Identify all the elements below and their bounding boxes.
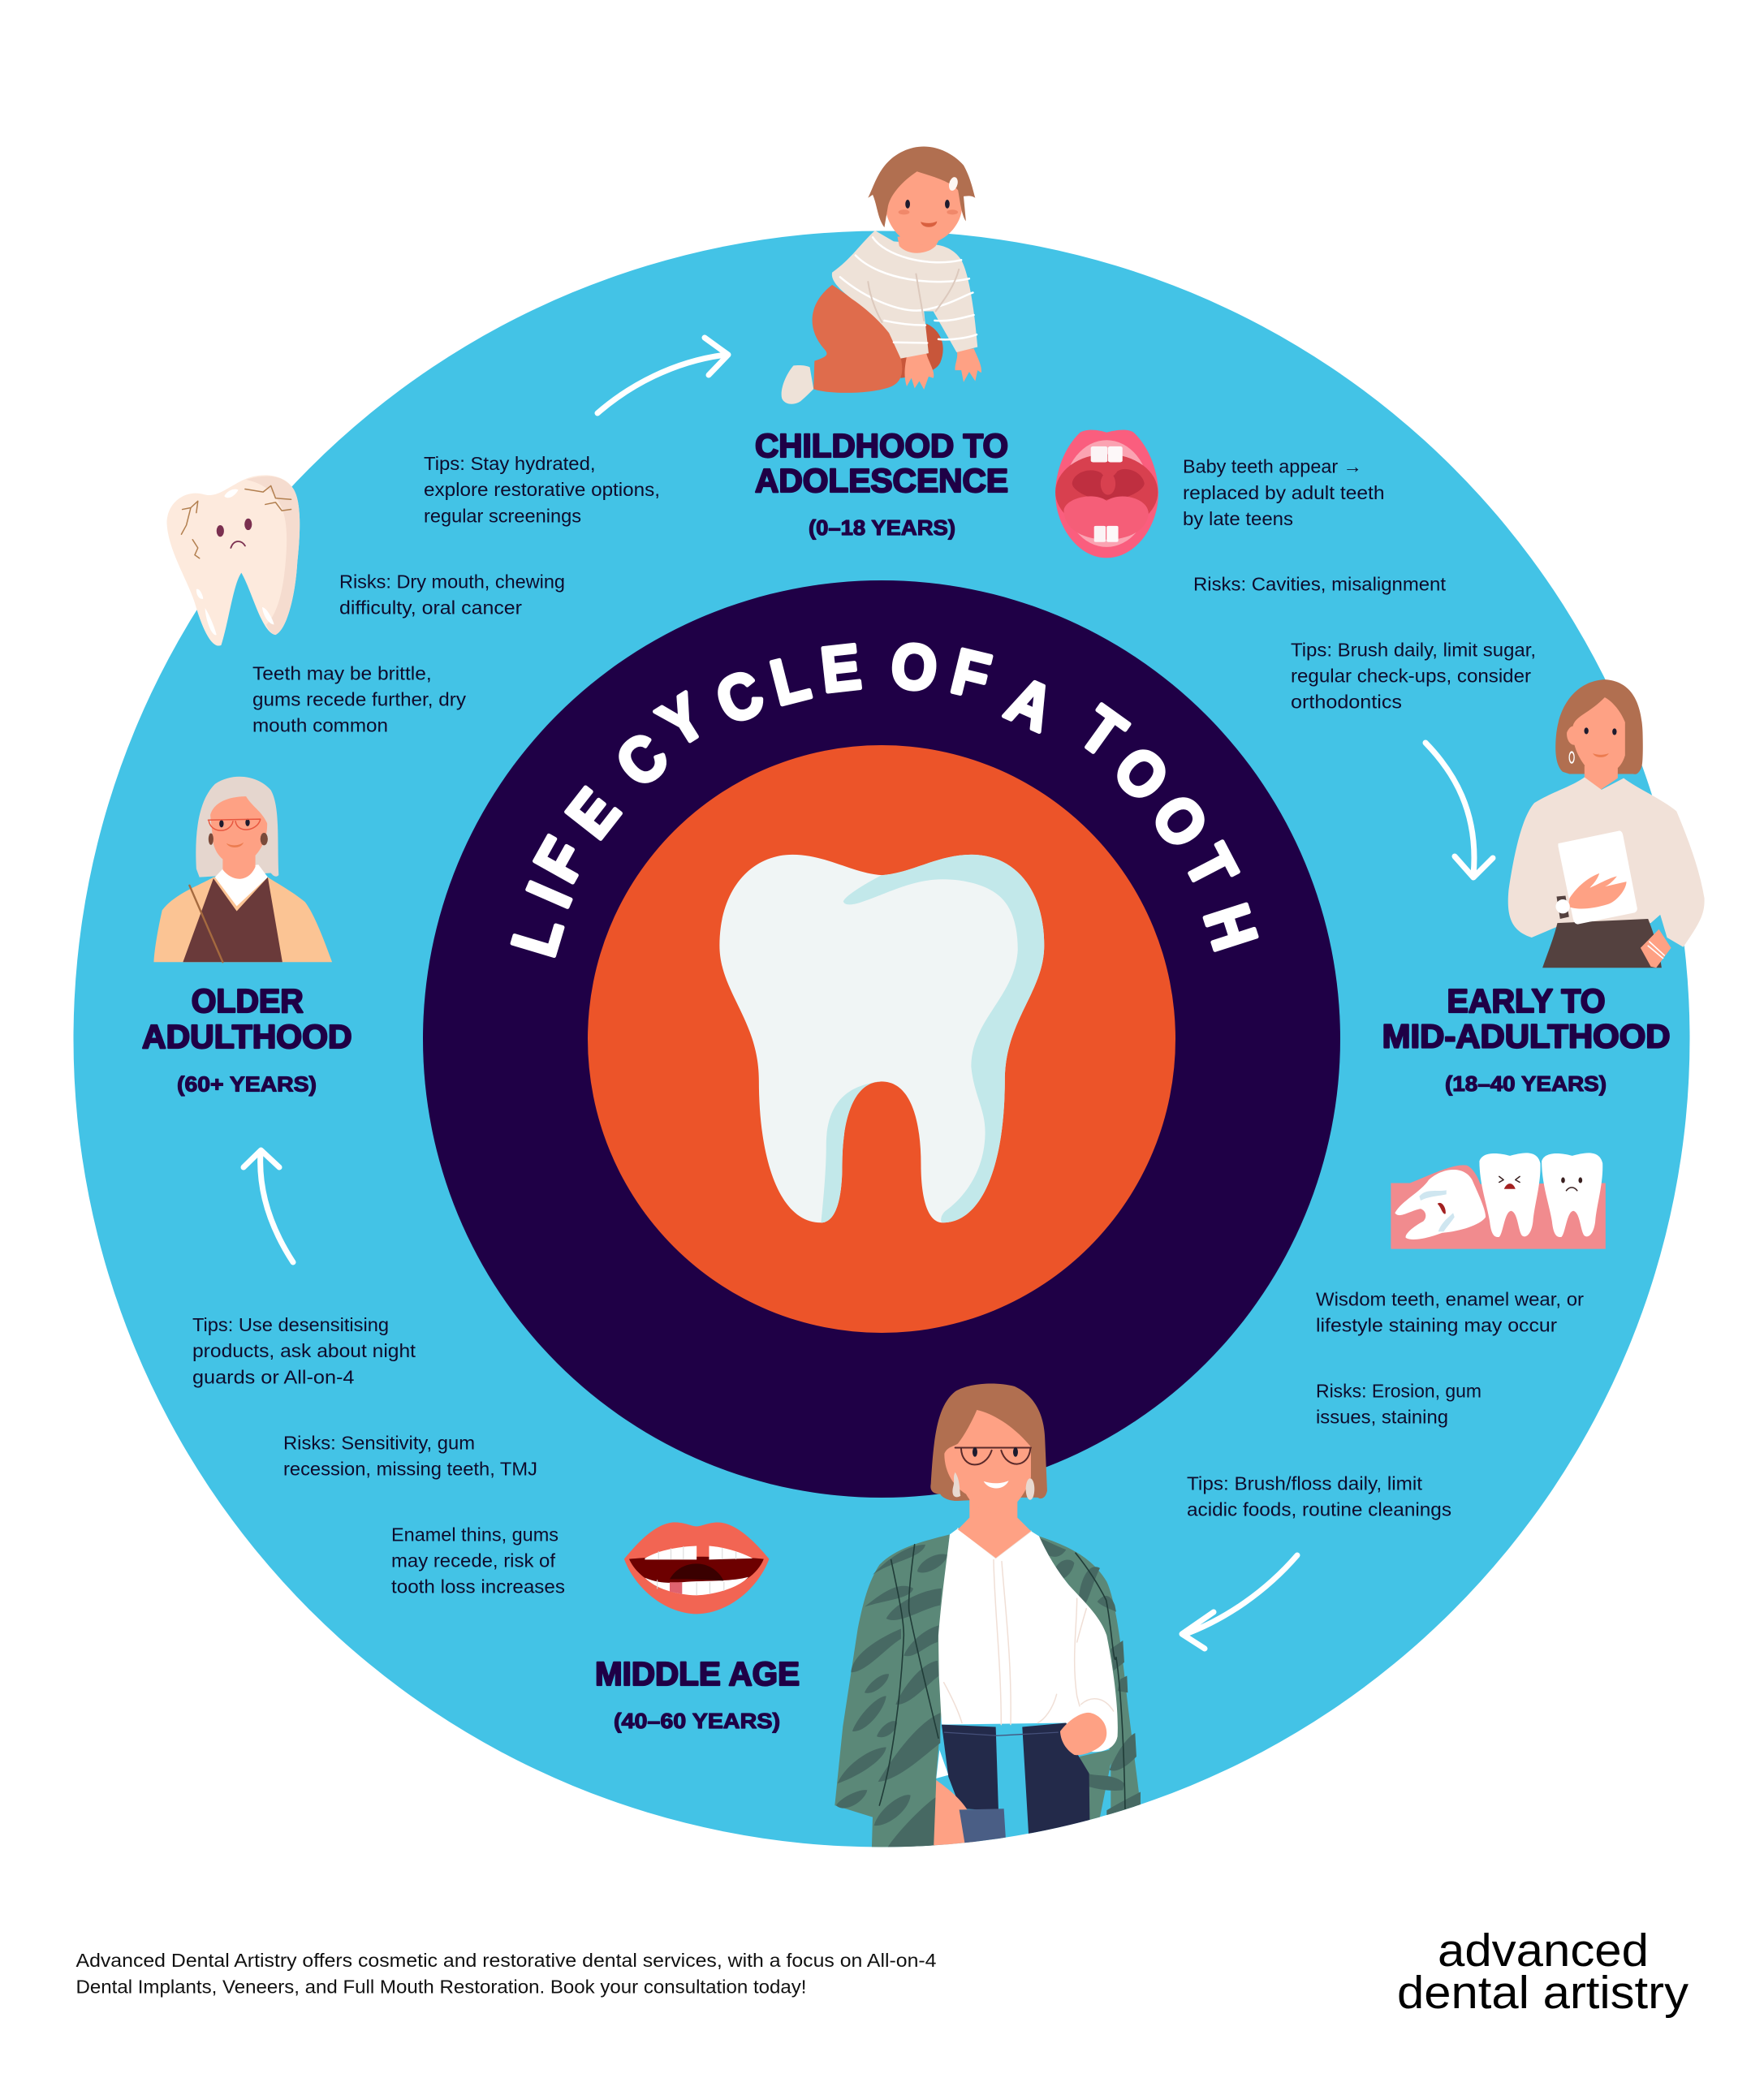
- title: life cycle of a tooth: F: [520, 827, 600, 893]
- text: childhood description: Baby teeth appear →: [1183, 456, 1362, 477]
- heading: middle age: [595, 1655, 800, 1733]
- title: life cycle of a tooth: L: [764, 641, 816, 718]
- title: life cycle of a tooth: O: [1101, 732, 1183, 815]
- title: life cycle of a tooth: F: [945, 635, 997, 713]
- text: older adulthood description: mouth common: [252, 714, 388, 735]
- heading: childhood to adolescence: [755, 427, 1008, 540]
- text: childhood description: [1183, 456, 1385, 529]
- arrow: childhood to early adulthood: [1425, 743, 1493, 877]
- text: middle age description: tooth loss increases: [391, 1576, 565, 1597]
- illustration: middle-aged woman in green cardigan: [835, 1384, 1141, 1865]
- text: childhood tips: [1291, 640, 1536, 713]
- text: childhood tips: Tips: Brush daily, limit sugar,: [1291, 640, 1536, 661]
- text: older adulthood risks: Risks: Dry mouth, chewing: [339, 571, 565, 593]
- icon: wisdom teeth row: [1391, 1153, 1606, 1249]
- title: life cycle of a tooth: A: [997, 663, 1064, 745]
- text: adulthood risks: Risks: Erosion, gum: [1316, 1380, 1482, 1401]
- text: older adulthood tips: [424, 453, 660, 526]
- text: older adulthood tips: regular screenings: [424, 505, 581, 526]
- heading: early to mid-adulthood: EARLY TO: [1447, 982, 1606, 1020]
- title: life cycle of a tooth: I: [513, 873, 584, 916]
- text: childhood risks: Risks: Cavities, misalignment: [1193, 573, 1447, 594]
- text: adulthood description: lifestyle staining may occur: [1316, 1315, 1557, 1336]
- heading: middle age: MIDDLE AGE: [595, 1655, 800, 1692]
- icon: open mouth with baby teeth: [1055, 430, 1158, 558]
- title: life cycle of a tooth: [498, 629, 1271, 964]
- footer text: [76, 1950, 937, 1997]
- title: life cycle of a tooth: O: [1138, 782, 1223, 860]
- text: middle age risks: [283, 1432, 537, 1479]
- arrow: middle age to older adulthood: [244, 1150, 293, 1262]
- text: childhood description: by late teens: [1183, 508, 1293, 529]
- heading: middle age: (40–60 YEARS): [614, 1709, 780, 1733]
- text: older adulthood tips: explore restorative options,: [424, 479, 660, 500]
- text: childhood tips: orthodontics: [1291, 692, 1402, 713]
- heading: early to mid-adulthood: (18–40 YEARS): [1445, 1071, 1607, 1096]
- text: childhood description: replaced by adult teeth: [1183, 482, 1385, 503]
- text: adulthood risks: issues, staining: [1316, 1406, 1448, 1427]
- title: life cycle of a tooth: E: [553, 776, 632, 851]
- text: older adulthood description: Teeth may be brittle,: [252, 662, 432, 683]
- text: middle age tips: guards or All-on-4: [192, 1367, 355, 1388]
- text: adulthood risks: [1316, 1380, 1482, 1427]
- title: life cycle of a tooth: T: [1171, 834, 1251, 899]
- title: life cycle of a tooth: Y: [646, 679, 717, 761]
- title: life cycle of a tooth: L: [498, 909, 576, 964]
- text: adulthood description: [1316, 1289, 1584, 1336]
- text: middle age description: Enamel thins, gums: [391, 1524, 559, 1546]
- heading: childhood to adolescence: ADOLESCENCE: [755, 462, 1008, 499]
- title: life cycle of a tooth: O: [889, 629, 940, 704]
- icon: lips with missing tooth: [624, 1522, 769, 1614]
- text: middle age tips: [192, 1314, 416, 1388]
- title: life cycle of a tooth: C: [602, 719, 681, 800]
- text: older adulthood description: [252, 662, 467, 735]
- text: middle age risks: recession, missing teeth, TMJ: [283, 1458, 537, 1479]
- footer text: Dental Implants, Veneers, and Full Mouth Restoration. Book your consultation today!: [76, 1976, 807, 1997]
- navy inner circle: [423, 580, 1340, 1498]
- text: middle age risks: Risks: Sensitivity, gum: [283, 1432, 475, 1453]
- outer blue circle: [73, 231, 1690, 1847]
- text: middle age description: [391, 1524, 565, 1597]
- heading: older adulthood: ADULTHOOD: [142, 1018, 352, 1055]
- logo: advanced dental artistry: dental artistry: [1397, 1967, 1689, 2019]
- logo: advanced dental artistry: advanced: [1438, 1925, 1649, 1977]
- arrow: older adulthood to childhood: [597, 338, 728, 413]
- title: life cycle of a tooth: E: [817, 631, 864, 705]
- heading: early to mid-adulthood: MID-ADULTHOOD: [1382, 1018, 1671, 1055]
- footer text: Advanced Dental Artistry offers cosmetic and restorative dental services, with a focus on All-on-4: [76, 1950, 937, 1971]
- heading: early to mid-adulthood: [1382, 982, 1671, 1096]
- text: middle age tips: products, ask about night: [192, 1340, 416, 1361]
- text: adulthood tips: acidic foods, routine cleanings: [1187, 1498, 1451, 1520]
- title: life cycle of a tooth: H: [1191, 896, 1271, 958]
- orange core circle: [588, 745, 1175, 1333]
- heading: childhood to adolescence: CHILDHOOD TO: [755, 427, 1008, 464]
- heading: older adulthood: OLDER: [192, 982, 304, 1020]
- icon: cracked old tooth: [166, 475, 300, 646]
- heading: older adulthood: [142, 982, 352, 1096]
- text: middle age description: may recede, risk of: [391, 1550, 556, 1571]
- text: adulthood tips: Tips: Brush/floss daily, limit: [1187, 1472, 1423, 1494]
- text: middle age tips: Tips: Use desensitising: [192, 1314, 389, 1335]
- title: life cycle of a tooth: T: [1067, 692, 1138, 771]
- heading: childhood to adolescence: (0–18 YEARS): [809, 515, 955, 540]
- text: adulthood description: Wisdom teeth, enamel wear, or: [1316, 1289, 1584, 1310]
- heading: older adulthood: (60+ YEARS): [177, 1071, 317, 1096]
- icon: central tooth: [719, 855, 1044, 1222]
- text: older adulthood description: gums recede further, dry: [252, 688, 467, 709]
- text: older adulthood tips: Tips: Stay hydrated,: [424, 453, 596, 474]
- text: adulthood tips: [1187, 1472, 1451, 1520]
- illustration: crawling toddler: [782, 147, 981, 404]
- arrow: adulthood to middle age: [1182, 1555, 1297, 1649]
- title: life cycle of a tooth: C: [706, 656, 773, 738]
- illustration: adult woman with tablet: [1508, 679, 1705, 968]
- logo: advanced dental artistry: [1397, 1925, 1689, 2019]
- illustration: older woman: [153, 777, 332, 962]
- text: older adulthood risks: [339, 571, 565, 619]
- text: childhood tips: regular check-ups, consider: [1291, 666, 1531, 687]
- text: older adulthood risks: difficulty, oral cancer: [339, 597, 522, 619]
